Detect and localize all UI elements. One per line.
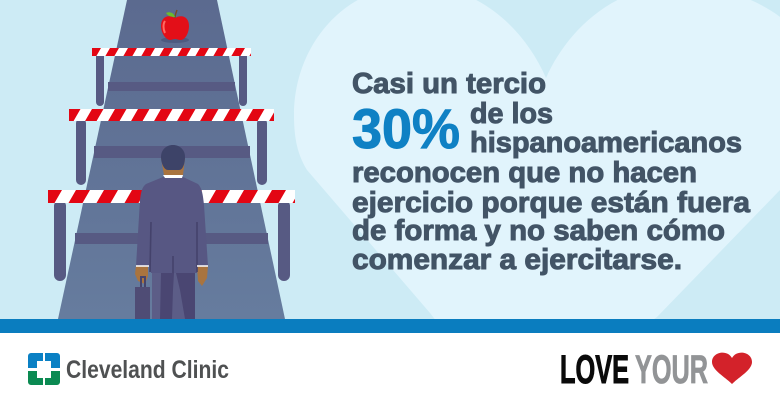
- logo: Cleveland Clinic wordmark: Cleveland Clinic: [66, 356, 229, 384]
- statistic: 30%: 30%: [352, 97, 460, 160]
- line: reconocen: reconocen que no hacen: [352, 157, 697, 189]
- icon: red heart: [712, 353, 752, 384]
- hands: [135, 266, 148, 284]
- neck and ears: [161, 158, 185, 175]
- head: [161, 145, 185, 170]
- line: de forma: de forma y no saben cómo: [352, 215, 725, 247]
- hurdle: near: [48, 190, 295, 281]
- line: ejercicio: ejercicio porque están fuera: [352, 187, 751, 219]
- headline text: [352, 68, 751, 276]
- road band middle: [94, 146, 250, 158]
- line: de los: de los: [470, 98, 553, 130]
- blue band: [0, 319, 780, 333]
- collar: [163, 175, 183, 178]
- road band near: [75, 233, 268, 244]
- trousers: [152, 270, 195, 319]
- hurdle: far: [92, 48, 251, 106]
- logo: Cleveland Clinic cross: [28, 353, 60, 385]
- cuffs: [136, 265, 208, 267]
- footer: [0, 333, 780, 410]
- briefcase: [135, 287, 150, 319]
- line: hispanoamericanos: hispanoamericanos: [470, 127, 742, 159]
- slogan: YOUR: YOUR: [635, 348, 708, 392]
- line: Casi un tercio: Casi un tercio: [352, 68, 546, 100]
- figure: businessman: [135, 145, 208, 319]
- icon: apple: [161, 10, 189, 43]
- road: [58, 0, 285, 319]
- line: comenzar: comenzar a ejercitarse.: [352, 244, 682, 276]
- jacket: [136, 177, 208, 273]
- hurdle: middle: [69, 109, 274, 185]
- background heart: [294, 0, 780, 322]
- slogan: LOVE: LOVE: [560, 348, 629, 392]
- background: [0, 0, 780, 320]
- road band far: [108, 82, 235, 91]
